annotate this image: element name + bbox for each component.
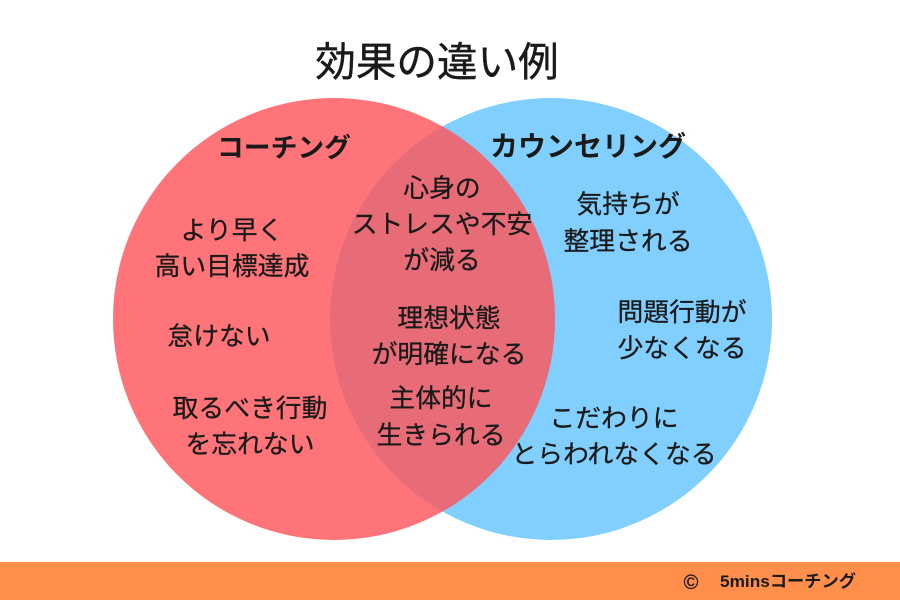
shared text: live proactively <box>376 384 506 450</box>
counseling text: organize feelings: 整理される <box>564 227 692 256</box>
shared text: clear ideal state: 理想状態 <box>397 304 501 333</box>
coaching text: reach goals faster <box>155 217 309 281</box>
counseling text: fewer problem behaviors: 少なくなる <box>618 334 746 363</box>
shared text: less stress <box>352 174 532 275</box>
copyright: 5minsコーチング <box>720 571 856 591</box>
counseling text: organize feelings: 気持ちが <box>576 190 680 219</box>
heading: counseling: カウンセリング <box>490 130 686 162</box>
counseling text: fewer problem behaviors: 問題行動が <box>618 298 747 327</box>
shared text: less stress: 心身の <box>403 174 481 203</box>
shared text: clear ideal state: が明確になる <box>372 340 526 369</box>
coaching text: do not forget actions: 取るべき行動 <box>173 394 327 423</box>
counseling text: free from obsession: こだわりに <box>550 405 678 433</box>
coaching text: do not forget actions <box>173 394 327 459</box>
copyright: © <box>684 572 699 594</box>
coaching text: reach goals faster: 高い目標達成 <box>155 252 309 281</box>
coaching text: not lazy: 怠けない <box>167 322 271 351</box>
counseling text: fewer problem behaviors <box>618 298 747 363</box>
circle: counseling <box>330 98 772 540</box>
counseling text: free from obsession <box>511 405 717 469</box>
copyright <box>684 571 856 594</box>
coaching text: reach goals faster: より早く <box>181 217 283 245</box>
shared text: clear ideal state <box>372 304 526 369</box>
shared text: less stress: が減る <box>403 246 481 275</box>
circle: coaching <box>113 98 555 540</box>
shared text: less stress: ストレスや不安 <box>352 210 532 239</box>
shared text: live proactively: 主体的に <box>389 384 493 413</box>
footer band <box>0 562 900 600</box>
counseling text: organize feelings <box>564 190 692 256</box>
counseling text: free from obsession: とらわれなくなる <box>511 441 717 469</box>
venn diagram <box>113 98 772 540</box>
heading: coaching: コーチング <box>217 132 351 163</box>
overlap region <box>330 126 555 512</box>
coaching text: do not forget actions: を忘れない <box>186 431 314 459</box>
title: 効果の違い例 <box>315 39 559 85</box>
shared text: live proactively: 生きられる <box>376 421 506 450</box>
